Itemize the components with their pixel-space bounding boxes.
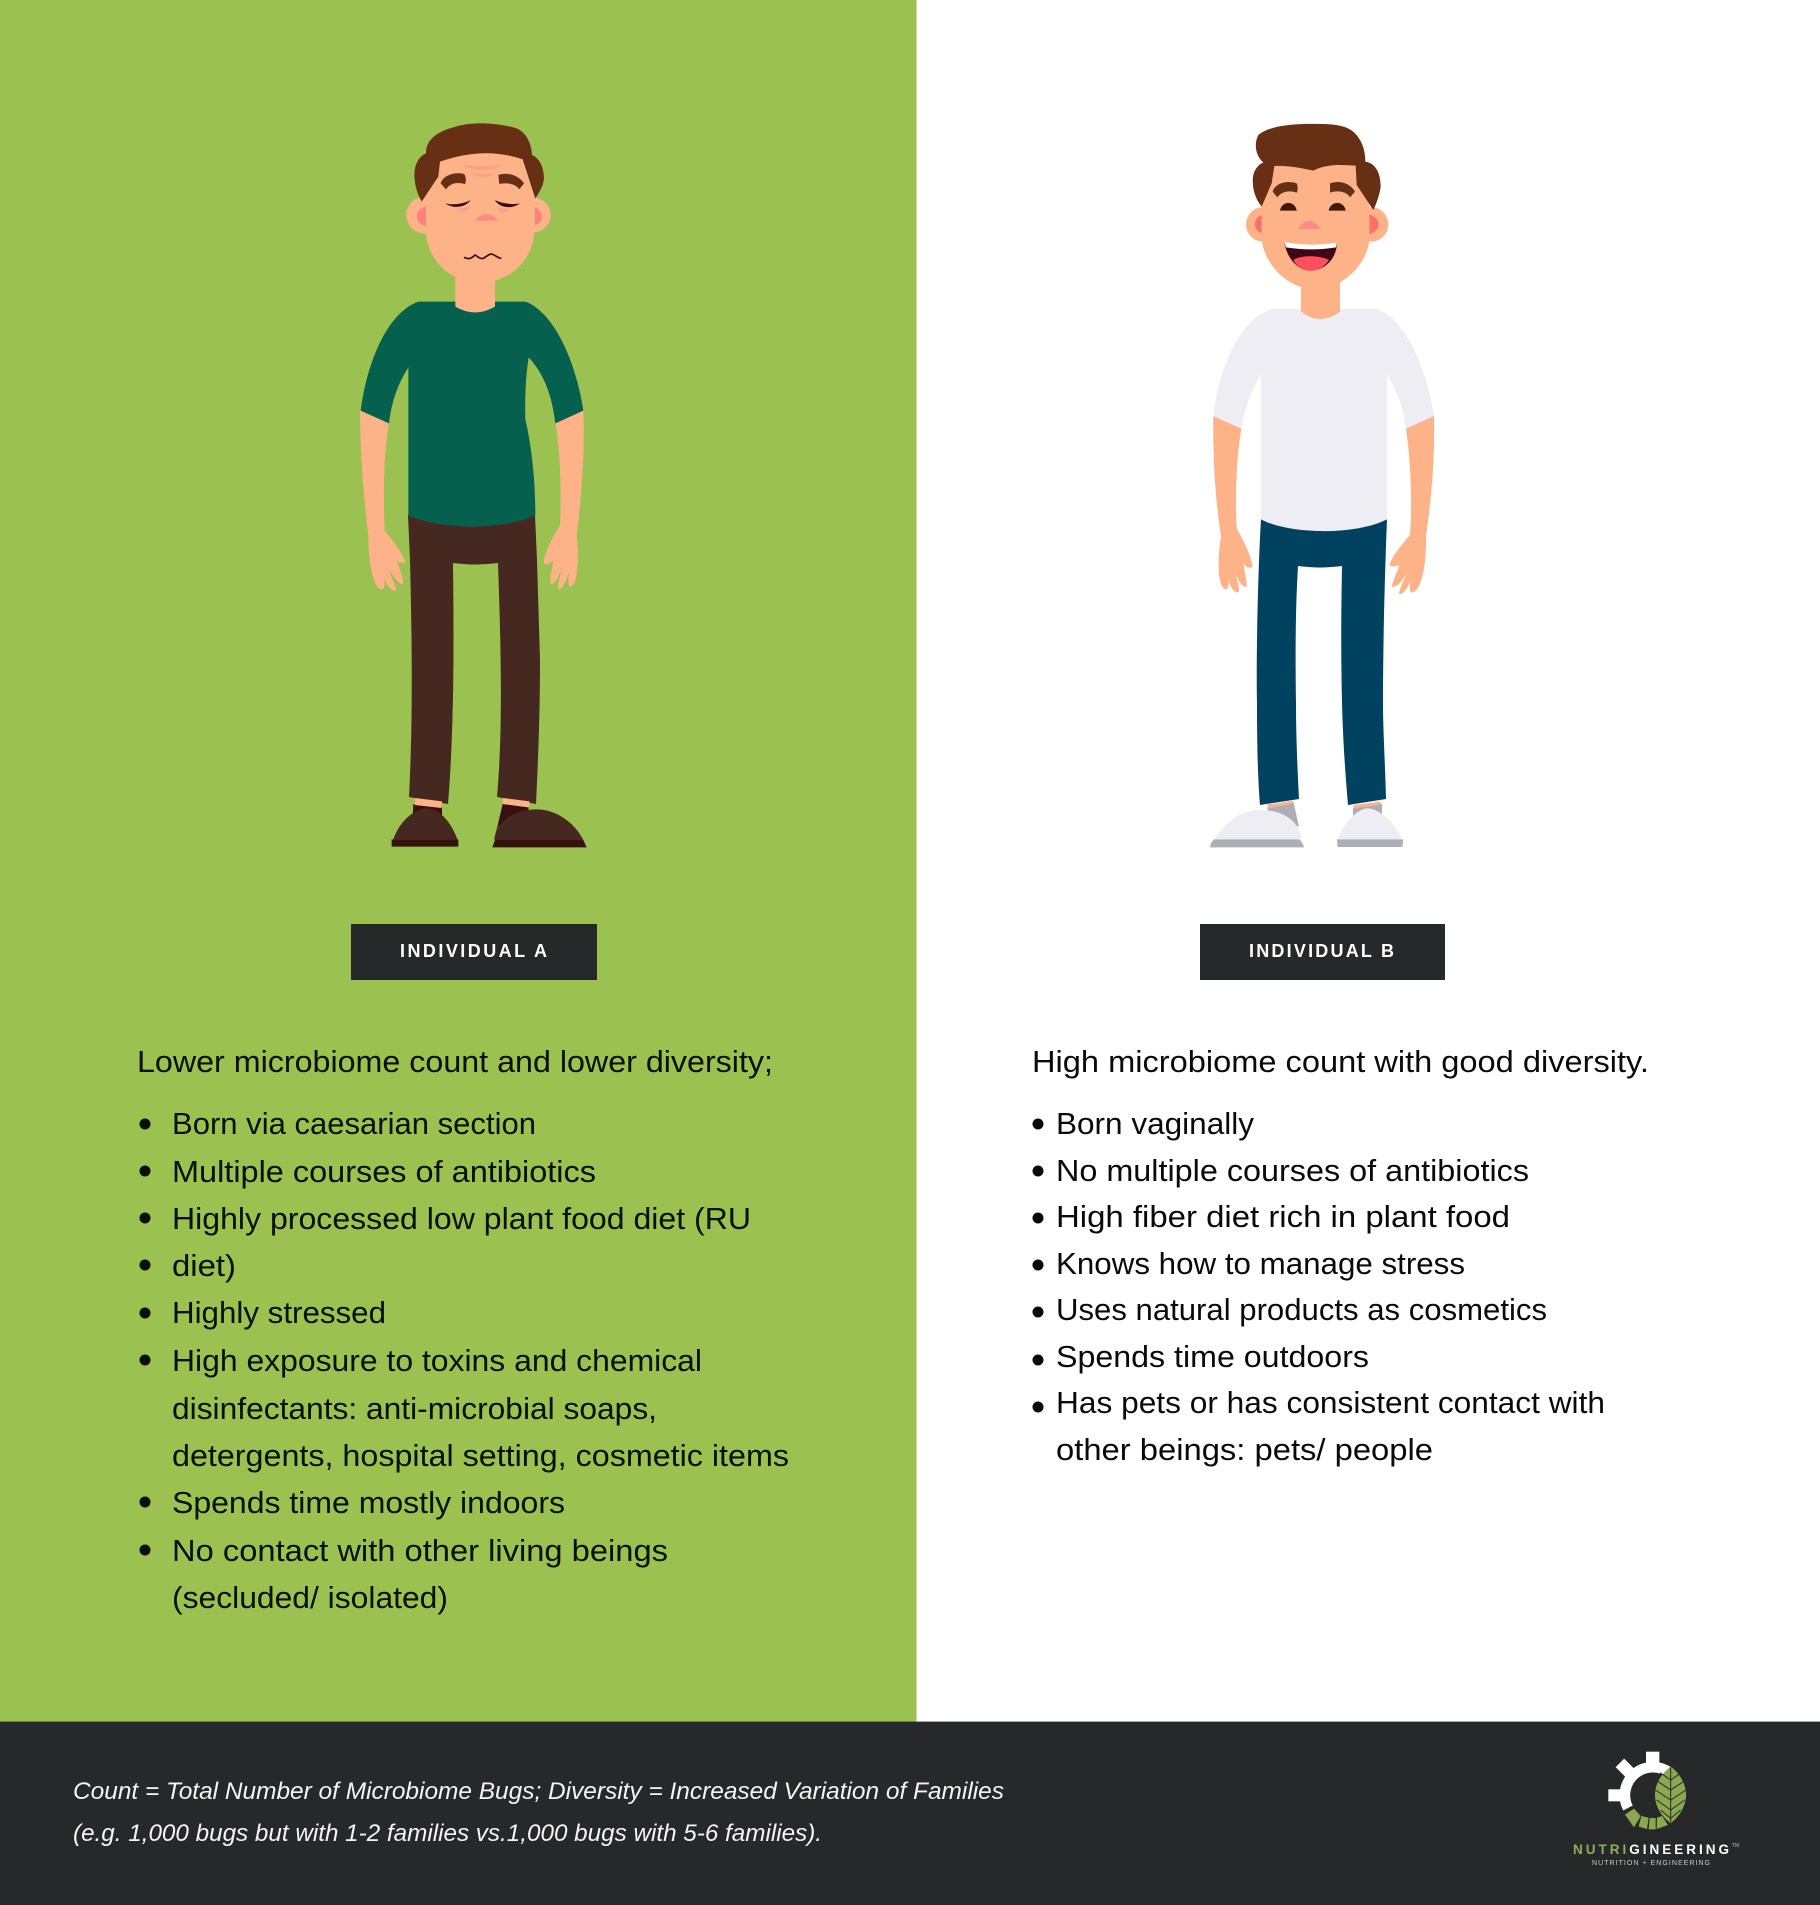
bullet list: individual B — [1032, 1106, 1605, 1467]
panel: individual B background — [917, 0, 1820, 1722]
label badge: individual A: INDIVIDUAL A — [400, 941, 547, 961]
bullet list: individual A: Multiple courses of antibiotics — [172, 1154, 596, 1189]
bullet list: individual B: High fiber diet rich in plant food — [1056, 1199, 1510, 1234]
bullet list: individual B: Born vaginally — [1056, 1106, 1255, 1141]
logo: Nutrigineering — [1573, 1752, 1739, 1867]
bullet list: individual A: Highly processed low plant food diet (RU — [172, 1201, 751, 1236]
panel: footer — [0, 1722, 1820, 1905]
illustration: individual B, happy man — [1210, 124, 1434, 847]
tagline: NUTRITION + ENGINEERING — [1592, 1860, 1710, 1867]
green shirt of individual A — [361, 302, 583, 526]
head of individual B — [1246, 124, 1388, 319]
footnote text — [73, 1778, 1004, 1847]
bullet list: individual B: Has pets or has consistent contact with — [1056, 1385, 1605, 1420]
footnote text: (e.g. 1,000 bugs but with 1-2 families vs.1,000 bugs with 5-6 families). — [73, 1820, 822, 1847]
bullet list: individual A: Spends time mostly indoors — [172, 1485, 565, 1520]
head of individual A — [406, 123, 551, 312]
bullet list: individual B: Uses natural products as cosmetics — [1056, 1292, 1547, 1327]
arms of individual B — [1213, 416, 1434, 594]
bullet list: individual B: other beings: pets/ people — [1056, 1432, 1433, 1467]
bullet list: individual A: diet) — [172, 1248, 236, 1283]
trousers of individual A — [408, 515, 540, 804]
label badge: individual B: INDIVIDUAL B — [1249, 941, 1394, 961]
shoes of individual A — [392, 798, 587, 847]
bullet list: individual A: (secluded/ isolated) — [172, 1580, 448, 1615]
panel: individual A background — [0, 0, 917, 1722]
trousers of individual B — [1257, 519, 1387, 805]
bullet list: individual A: disinfectants: anti-microbial soaps, — [172, 1391, 657, 1426]
footnote text: Count = Total Number of Microbiome Bugs; Diversity = Increased Variation of Families — [73, 1778, 1004, 1805]
icon: gear and leaf — [1608, 1752, 1686, 1829]
bullet list: individual A: detergents, hospital setting, cosmetic items — [172, 1438, 789, 1473]
bullet list: individual A: Highly stressed — [172, 1295, 386, 1330]
logo: Nutrigineering: TM — [1732, 1843, 1739, 1849]
bullet list: individual A — [140, 1106, 789, 1615]
illustration: individual A, unwell man — [360, 123, 587, 847]
label badge: individual A — [351, 924, 597, 980]
white shirt of individual B — [1213, 309, 1434, 531]
bullet list: individual A: High exposure to toxins and chemical — [172, 1343, 702, 1378]
shoes of individual B — [1210, 801, 1403, 847]
wordmark: NUTRIGINEERING — [1573, 1842, 1729, 1857]
label badge: individual B — [1200, 924, 1445, 980]
bullet list: individual A: No contact with other living beings — [172, 1533, 668, 1568]
arms of individual A — [360, 411, 584, 591]
bullet list: individual B: No multiple courses of antibiotics — [1056, 1153, 1529, 1188]
bullet list: individual A: Born via caesarian section — [172, 1106, 536, 1141]
text block: individual A summary: Lower microbiome count and lower diversity; — [137, 1044, 773, 1079]
bullet list: individual B: Spends time outdoors — [1056, 1339, 1369, 1374]
bullet list: individual B: Knows how to manage stress — [1056, 1246, 1465, 1281]
text block: individual B summary: High microbiome count with good diversity. — [1032, 1044, 1649, 1079]
